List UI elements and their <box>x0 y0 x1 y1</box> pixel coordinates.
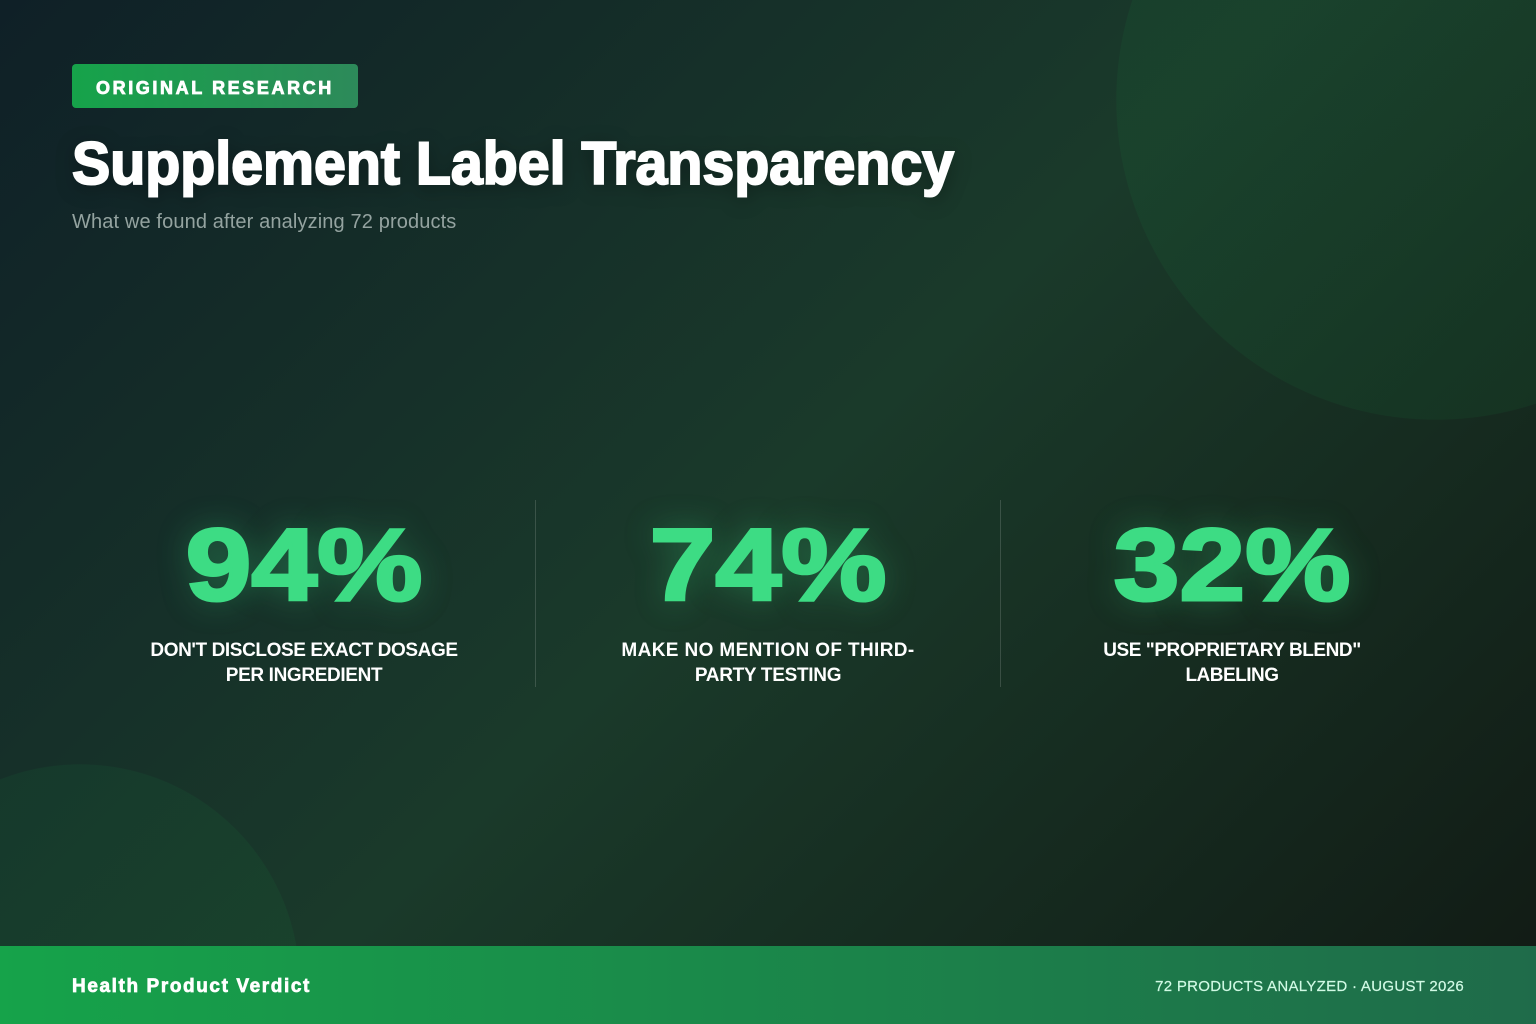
footer meta: 72 PRODUCTS ANALYZED · AUGUST 2026 <box>1155 978 1464 995</box>
stat label: PARTY TESTING <box>695 665 841 686</box>
stat number: 94% <box>186 508 422 622</box>
stat label <box>1103 640 1361 686</box>
subtitle: What we found after analyzing 72 products <box>72 211 456 233</box>
badge label: ORIGINAL RESEARCH <box>96 78 334 98</box>
stat label: MAKE NO MENTION OF THIRD- <box>621 640 915 661</box>
stat label <box>621 640 915 686</box>
stat label <box>150 640 458 686</box>
decorative circle: top right <box>1116 0 1536 420</box>
stat number: 32% <box>1114 508 1350 622</box>
decorative circle: bottom left <box>0 764 300 946</box>
stat: 94% <box>150 508 458 686</box>
footer bar <box>0 946 1536 1024</box>
footer brand: Health Product Verdict <box>72 976 311 997</box>
stat label: LABELING <box>1185 665 1279 686</box>
stat label: DON'T DISCLOSE EXACT DOSAGE <box>150 640 458 661</box>
title: Supplement Label Transparency <box>72 130 954 197</box>
stat label: PER INGREDIENT <box>226 665 382 686</box>
badge: original research <box>72 64 358 108</box>
stat: 74% <box>621 508 915 686</box>
stat number: 74% <box>650 508 886 622</box>
stat label: USE "PROPRIETARY BLEND" <box>1103 640 1361 661</box>
stat: 32% <box>1103 508 1361 686</box>
